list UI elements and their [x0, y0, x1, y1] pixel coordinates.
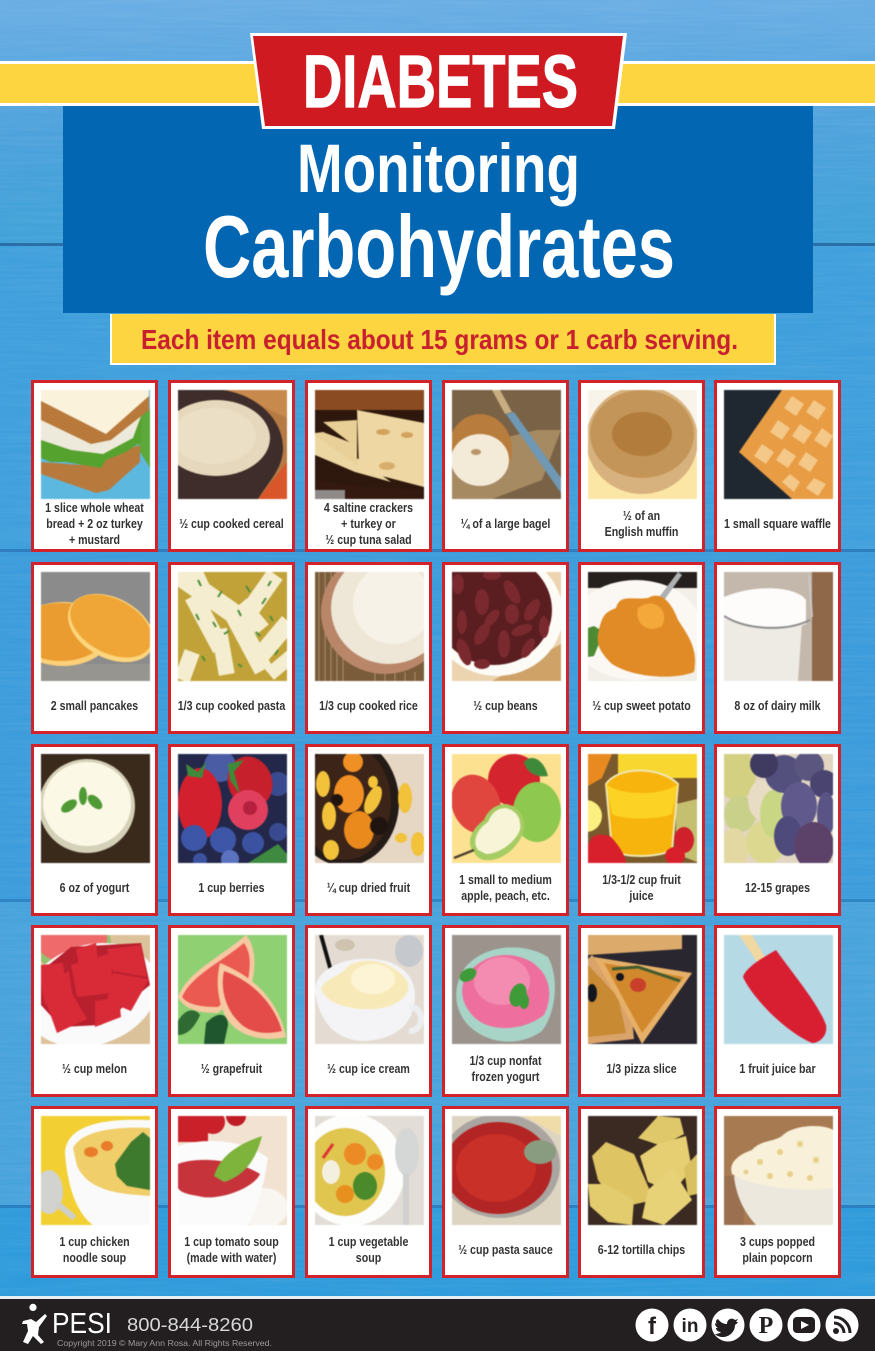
- caption: [324, 501, 413, 547]
- image: tortilla chips: [587, 1115, 698, 1226]
- card: pasta sauce: [442, 1106, 569, 1278]
- caption: 1 cup chicken: [59, 1235, 130, 1249]
- caption: [469, 1054, 542, 1084]
- image: chicken noodle soup: [40, 1115, 151, 1226]
- caption: 1 cup berries: [198, 881, 265, 895]
- caption: ¼ of a large bagel: [461, 517, 550, 531]
- card: crackers: [305, 380, 432, 552]
- footer bar: [0, 1296, 875, 1351]
- caption: 8 oz of dairy milk: [734, 699, 821, 713]
- caption: ½ grapefruit: [201, 1062, 262, 1076]
- caption: 3 cups popped: [740, 1235, 815, 1249]
- caption: [45, 501, 144, 547]
- logo: PESI figure: [22, 1304, 47, 1344]
- card: berries: [168, 744, 295, 916]
- card: beans: [442, 562, 569, 734]
- card: cereal: [168, 380, 295, 552]
- icon: rss: [826, 1308, 858, 1342]
- phone number: 800-844-8260: [127, 1314, 253, 1335]
- image: sandwich: [40, 390, 151, 500]
- caption: 12-15 grapes: [745, 881, 810, 895]
- caption: plain popcorn: [742, 1251, 813, 1265]
- caption: 2 small pancakes: [51, 699, 138, 713]
- caption: 6 oz of yogurt: [60, 881, 129, 895]
- image: watermelon cubes: [40, 934, 151, 1044]
- image: waffle: [723, 389, 834, 500]
- image: english muffin: [587, 389, 698, 500]
- card: rice: [305, 562, 432, 734]
- subtitle text: Each item equals about 15 grams or 1 carb serving.: [141, 324, 738, 355]
- caption: noodle soup: [63, 1251, 126, 1265]
- card: waffle: [714, 380, 841, 552]
- caption: + mustard: [69, 533, 120, 547]
- card: sandwich: [31, 380, 158, 552]
- header banner: [0, 33, 875, 365]
- heading: diabetes: DIABETES: [303, 40, 578, 123]
- image: mashed sweet potato: [587, 571, 698, 681]
- card: fruit: [442, 744, 569, 916]
- caption: English muffin: [605, 525, 678, 539]
- image: glass of milk: [724, 571, 834, 682]
- icon: pinterest: P: [759, 1313, 773, 1339]
- card: frozen yogurt: [442, 925, 569, 1097]
- image: pasta sauce pot: [451, 1116, 562, 1226]
- caption: bread + 2 oz turkey: [46, 517, 143, 531]
- caption: [459, 873, 552, 903]
- image: vegetable soup: [314, 1116, 424, 1226]
- card: popcorn: [714, 1106, 841, 1278]
- caption: ½ cup sweet potato: [592, 699, 691, 713]
- caption: ½ cup cooked cereal: [179, 517, 284, 531]
- caption: [184, 1235, 279, 1265]
- copyright: Copyright 2019 © Mary Ann Rosa. All Rights Reserved.: [57, 1338, 272, 1348]
- caption: 1/3 cup nonfat: [469, 1054, 542, 1068]
- caption: ½ cup ice cream: [327, 1062, 410, 1076]
- caption: ½ cup melon: [62, 1062, 127, 1076]
- image: yogurt bowl: [40, 753, 151, 864]
- red diabetes tag: [250, 33, 627, 129]
- caption: ½ cup beans: [473, 699, 538, 713]
- card: vegetable soup: [305, 1106, 432, 1278]
- card: tortilla chips: [578, 1106, 705, 1278]
- caption: 1/3 pizza slice: [606, 1062, 677, 1076]
- caption: 1/3-1/2 cup fruit: [602, 873, 681, 887]
- card: muffin: [578, 380, 705, 552]
- caption: juice: [629, 889, 654, 903]
- card: juice: [578, 744, 705, 916]
- caption: ½ cup tuna salad: [325, 533, 412, 547]
- image: bowl of rice: [314, 571, 425, 682]
- image: ice cream mug: [314, 934, 424, 1044]
- caption: apple, peach, etc.: [461, 889, 550, 903]
- caption: 1 cup vegetable: [329, 1235, 408, 1249]
- image: fruit juice: [587, 753, 698, 864]
- image: grapes: [723, 753, 834, 864]
- heading: carbohydrates: Carbohydrates: [203, 197, 675, 296]
- card: dried fruit: [305, 744, 432, 916]
- logo: PESI wordmark: PESI: [52, 1308, 112, 1340]
- image: tomato soup mug: [177, 1115, 288, 1226]
- image: dried fruit: [314, 753, 425, 864]
- card: bagel: [442, 380, 569, 552]
- card: pasta: [168, 562, 295, 734]
- image: mixed berries: [177, 753, 288, 864]
- heading: monitoring: Monitoring: [297, 130, 580, 207]
- caption: + turkey or: [341, 517, 396, 531]
- icon: facebook: [636, 1308, 668, 1342]
- caption: 1/3 cup cooked rice: [319, 699, 418, 713]
- caption: 1/3 cup cooked pasta: [178, 699, 285, 713]
- card: tomato soup: [168, 1106, 295, 1278]
- image: apple, peach and pear: [451, 753, 562, 864]
- icon: linkedin: [674, 1308, 706, 1342]
- image: popcorn bowl: [723, 1115, 834, 1226]
- image: bagel and knife: [451, 389, 562, 500]
- caption: [713, 1225, 842, 1275]
- image: pancakes: [40, 571, 151, 682]
- image: fruit juice popsicle: [724, 934, 834, 1044]
- card: pancakes: [31, 562, 158, 734]
- caption: 1 small square waffle: [724, 517, 831, 531]
- image: cooked cereal: [177, 389, 288, 500]
- image: pizza slices: [587, 934, 698, 1045]
- card: grapefruit: [168, 925, 295, 1097]
- caption: soup: [356, 1251, 381, 1265]
- caption: (made with water): [187, 1251, 276, 1265]
- icon: youtube: [788, 1308, 820, 1342]
- caption: ¼ cup dried fruit: [327, 881, 410, 895]
- card: juice bar: [714, 925, 841, 1097]
- image: pink frozen yogurt: [451, 934, 562, 1045]
- image: kidney beans: [451, 571, 562, 682]
- caption: 6-12 tortilla chips: [598, 1243, 685, 1257]
- subtitle band: [110, 314, 776, 365]
- card: melon: [31, 925, 158, 1097]
- caption: 1 small to medium: [459, 873, 552, 887]
- card: milk: [714, 562, 841, 734]
- card: pizza: [578, 925, 705, 1097]
- caption: 1 cup tomato soup: [184, 1235, 279, 1249]
- card: yogurt: [31, 744, 158, 916]
- card: sweet potato: [578, 562, 705, 734]
- yellow ribbon: [0, 61, 875, 106]
- caption: ½ of an: [623, 509, 660, 523]
- caption: [329, 1235, 408, 1265]
- card: grapes: [714, 744, 841, 916]
- icon: pinterest: [750, 1308, 782, 1342]
- icon: twitter: [712, 1308, 744, 1342]
- icon: facebook: f: [648, 1313, 657, 1340]
- card: ice cream: [305, 925, 432, 1097]
- image: saltine crackers: [314, 389, 425, 500]
- caption: [59, 1235, 130, 1265]
- caption: 1 fruit juice bar: [739, 1062, 816, 1076]
- caption: 1 slice whole wheat: [45, 501, 144, 515]
- icon: linkedin: in: [682, 1316, 698, 1337]
- caption: frozen yogurt: [472, 1070, 539, 1084]
- caption: 4 saltine crackers: [324, 501, 413, 515]
- image: grapefruit wedges: [177, 934, 288, 1045]
- blue title panel: [63, 106, 813, 313]
- card: chicken soup: [31, 1106, 158, 1278]
- image: penne pasta: [177, 571, 288, 682]
- caption: [605, 509, 678, 539]
- caption: [602, 873, 681, 903]
- caption: ½ cup pasta sauce: [458, 1243, 553, 1257]
